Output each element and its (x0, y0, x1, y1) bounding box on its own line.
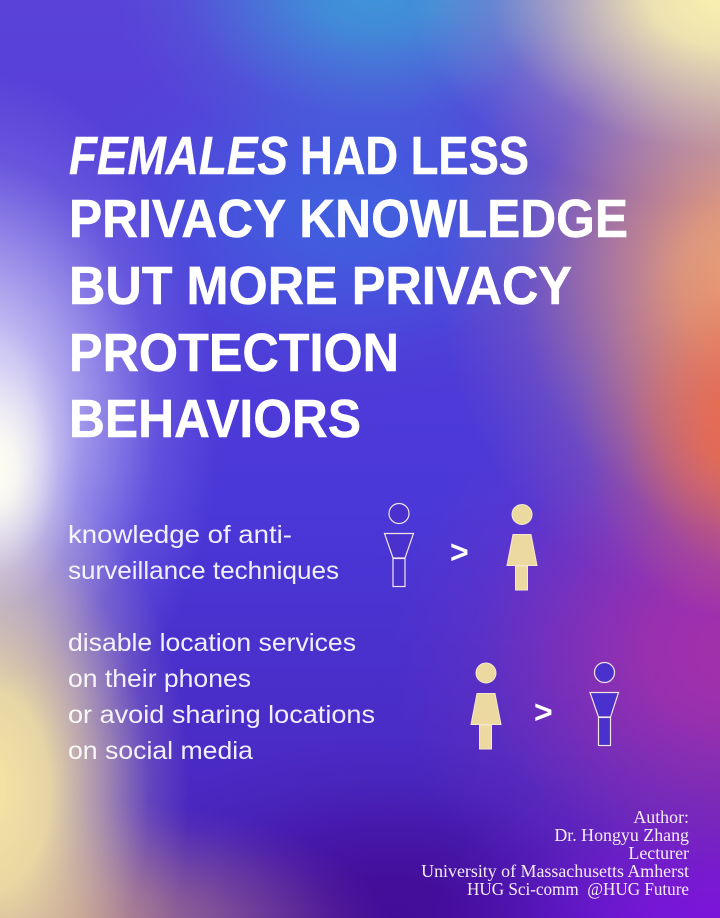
title: BUT MORE PRIVACY (69, 256, 572, 316)
title: PRIVACY KNOWLEDGE (69, 189, 628, 249)
text: location finding: disable location services (68, 629, 356, 657)
title: PROTECTION (69, 323, 399, 383)
title: HAD LESS (300, 126, 529, 186)
author credit: HUG Sci-comm @HUG Future (467, 879, 689, 899)
text: location finding: on social media (68, 737, 253, 765)
author credit: Dr. Hongyu Zhang (554, 825, 689, 845)
author credit: Author: (633, 807, 689, 827)
text: knowledge finding: knowledge of anti- (68, 521, 292, 549)
text: location finding: or avoid sharing locations (68, 701, 375, 729)
icon: female figure, filled (507, 504, 537, 590)
author credit: Lecturer (628, 843, 689, 863)
title: FEMALES (69, 126, 288, 186)
title (69, 126, 628, 449)
text: location finding: on their phones (68, 665, 251, 693)
text: knowledge finding (68, 521, 339, 585)
author credit: University of Massachusetts Amherst (421, 861, 689, 881)
text: location finding (68, 629, 375, 765)
title: BEHAVIORS (69, 389, 361, 449)
icon: male figure, blue (590, 662, 618, 746)
icon: female figure, filled (471, 663, 501, 749)
icon: male figure, outlined (384, 504, 414, 586)
text: knowledge finding: surveillance techniques (68, 557, 339, 585)
comparison sign: > (534, 694, 553, 730)
author credit (421, 807, 689, 899)
comparison sign: > (450, 534, 469, 570)
